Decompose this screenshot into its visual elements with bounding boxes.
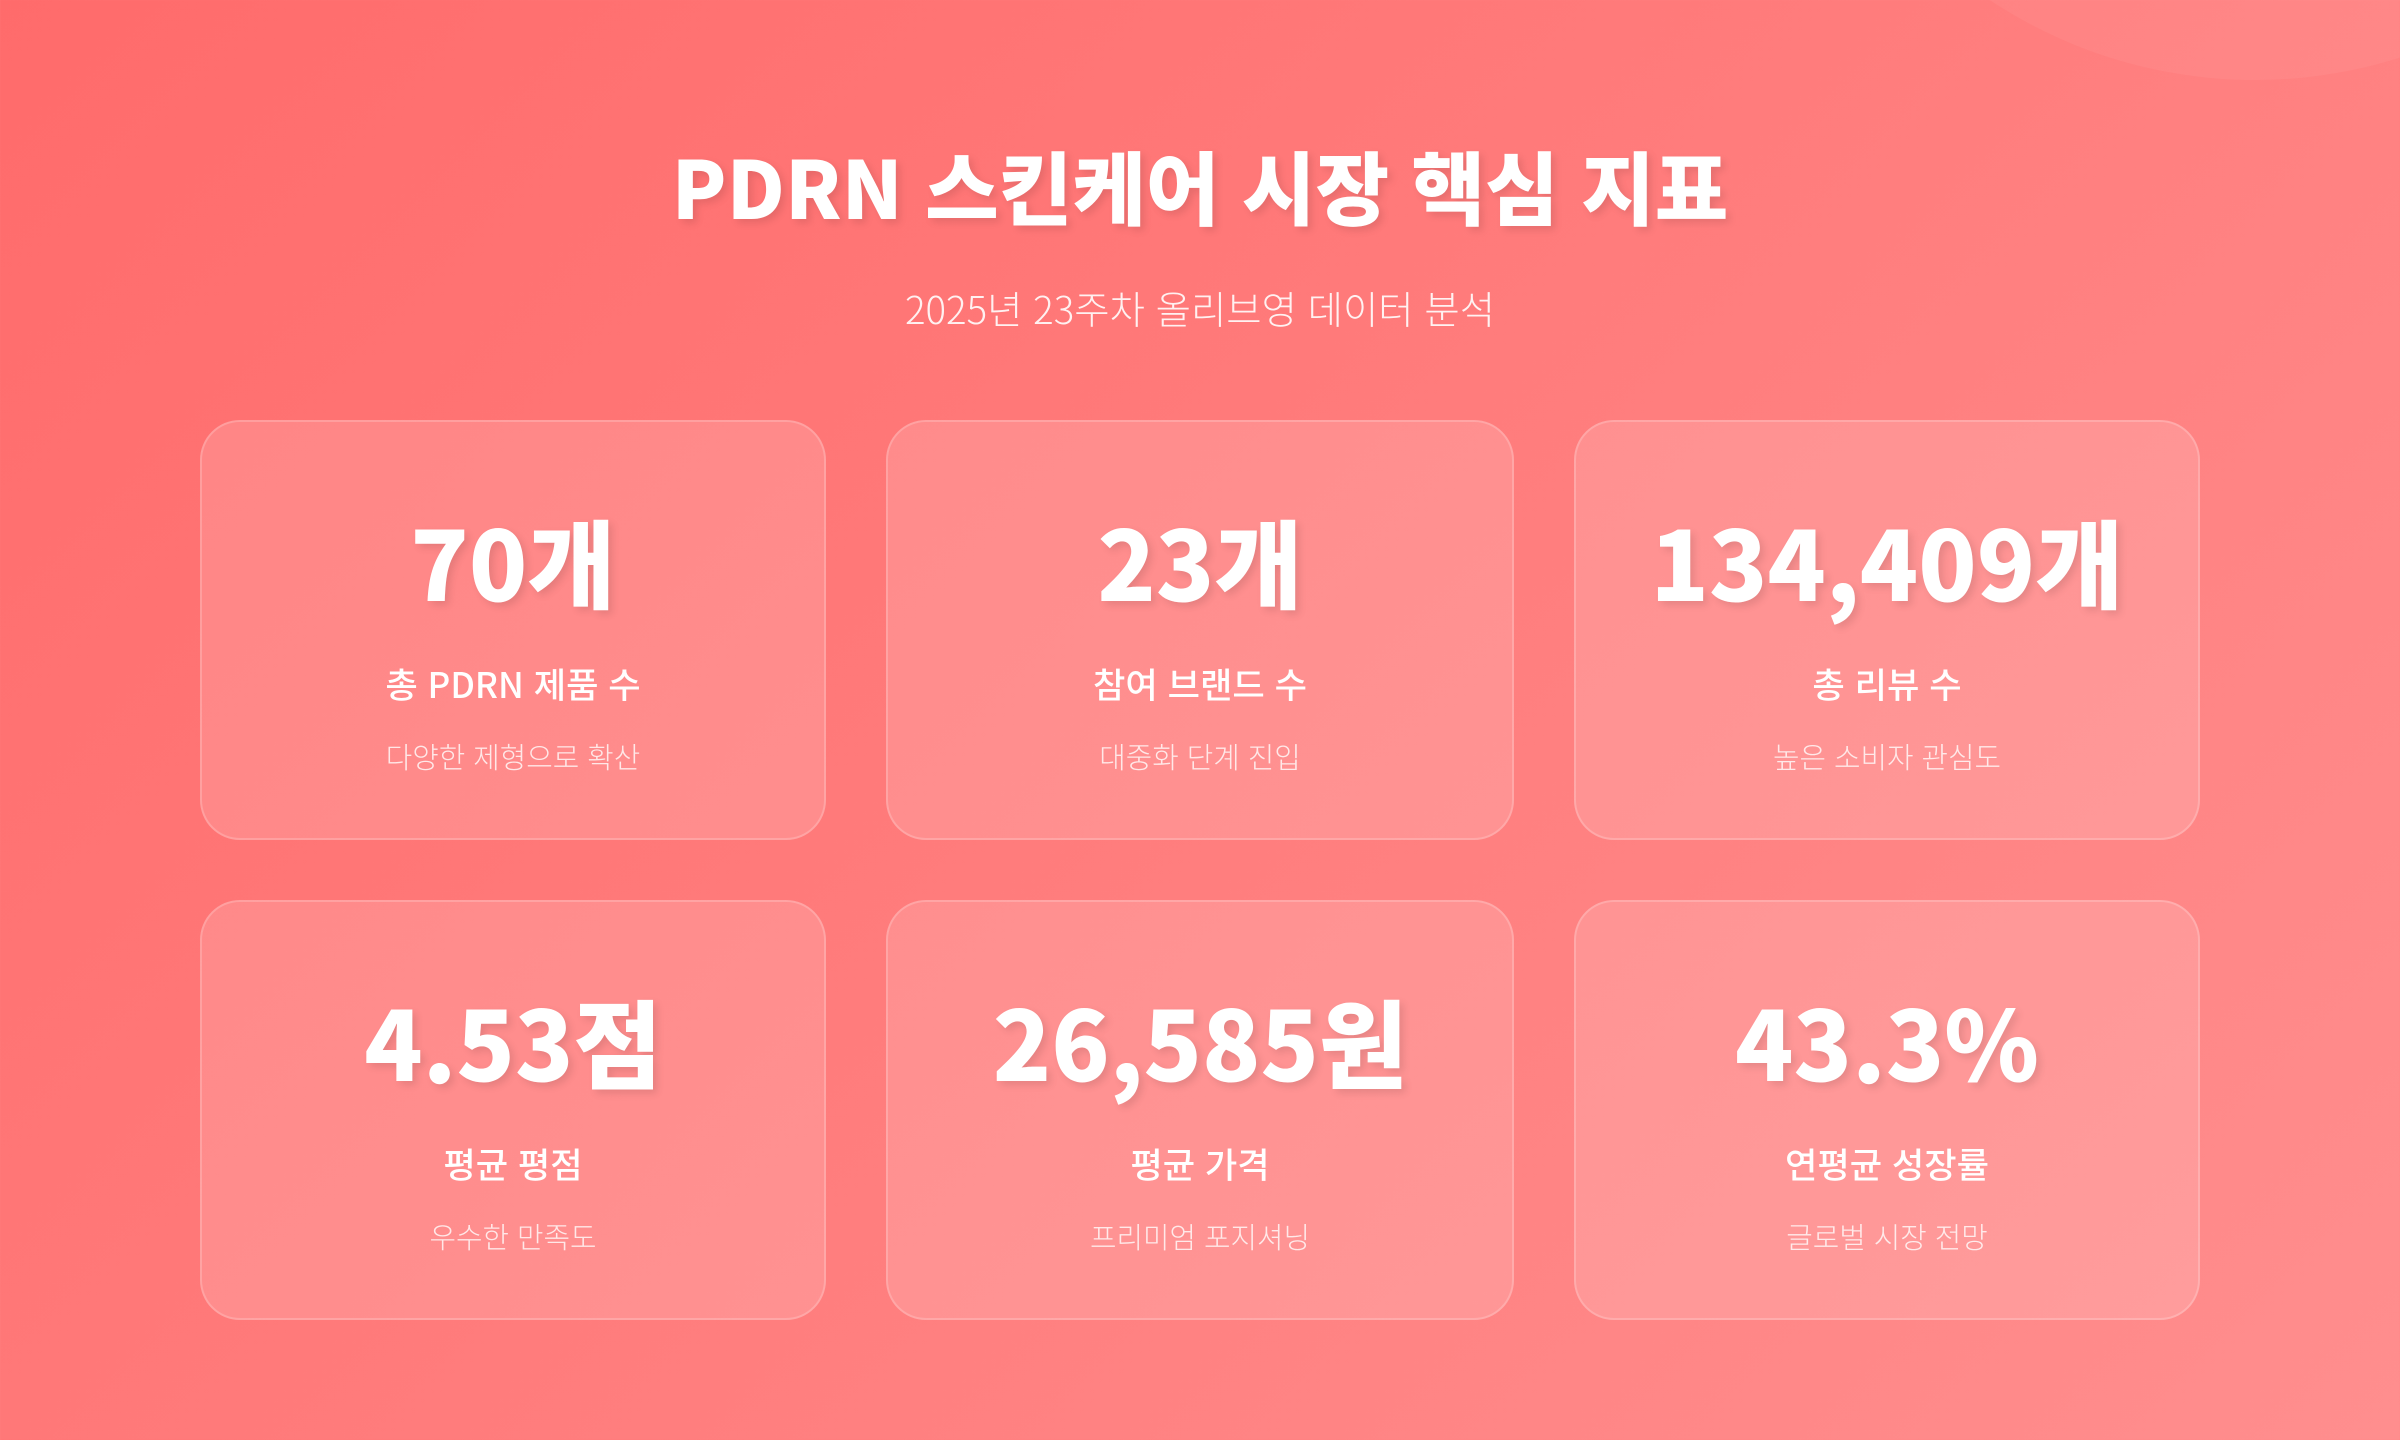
panel: brands [886,420,1514,840]
decorative circle top right [1775,0,2400,80]
stat label: 연평균 성장률 [1785,1138,1989,1189]
stat description: 프리미엄 포지셔닝 [1090,1216,1310,1257]
subtitle: 2025년 23주차 올리브영 데이터 분석 [905,280,1495,336]
panel: CAGR [1574,900,2200,1320]
title: PDRN 스킨케어 시장 핵심 지표 [672,127,1728,243]
stat value: 23개 [1097,490,1303,629]
stat label: 평균 평점 [443,1138,583,1189]
stat value: 26,585원 [993,970,1407,1109]
stat value: 43.3% [1735,970,2039,1109]
stat description: 높은 소비자 관심도 [1773,736,2001,777]
stat description: 글로벌 시장 전망 [1786,1216,1988,1257]
panel: average rating [200,900,826,1320]
stat description: 대중화 단계 진입 [1099,736,1301,777]
stat description: 다양한 제형으로 확산 [386,736,640,777]
stat label: 총 PDRN 제품 수 [385,658,641,709]
stat label: 평균 가격 [1130,1138,1270,1189]
stat label: 참여 브랜드 수 [1093,658,1307,709]
stat description: 우수한 만족도 [429,1216,597,1257]
stat value: 4.53점 [364,970,662,1109]
panel: total products [200,420,826,840]
panel: average price [886,900,1514,1320]
stat value: 70개 [410,490,616,629]
stat value: 134,409개 [1650,490,2124,629]
panel: reviews [1574,420,2200,840]
stat label: 총 리뷰 수 [1812,658,1962,709]
